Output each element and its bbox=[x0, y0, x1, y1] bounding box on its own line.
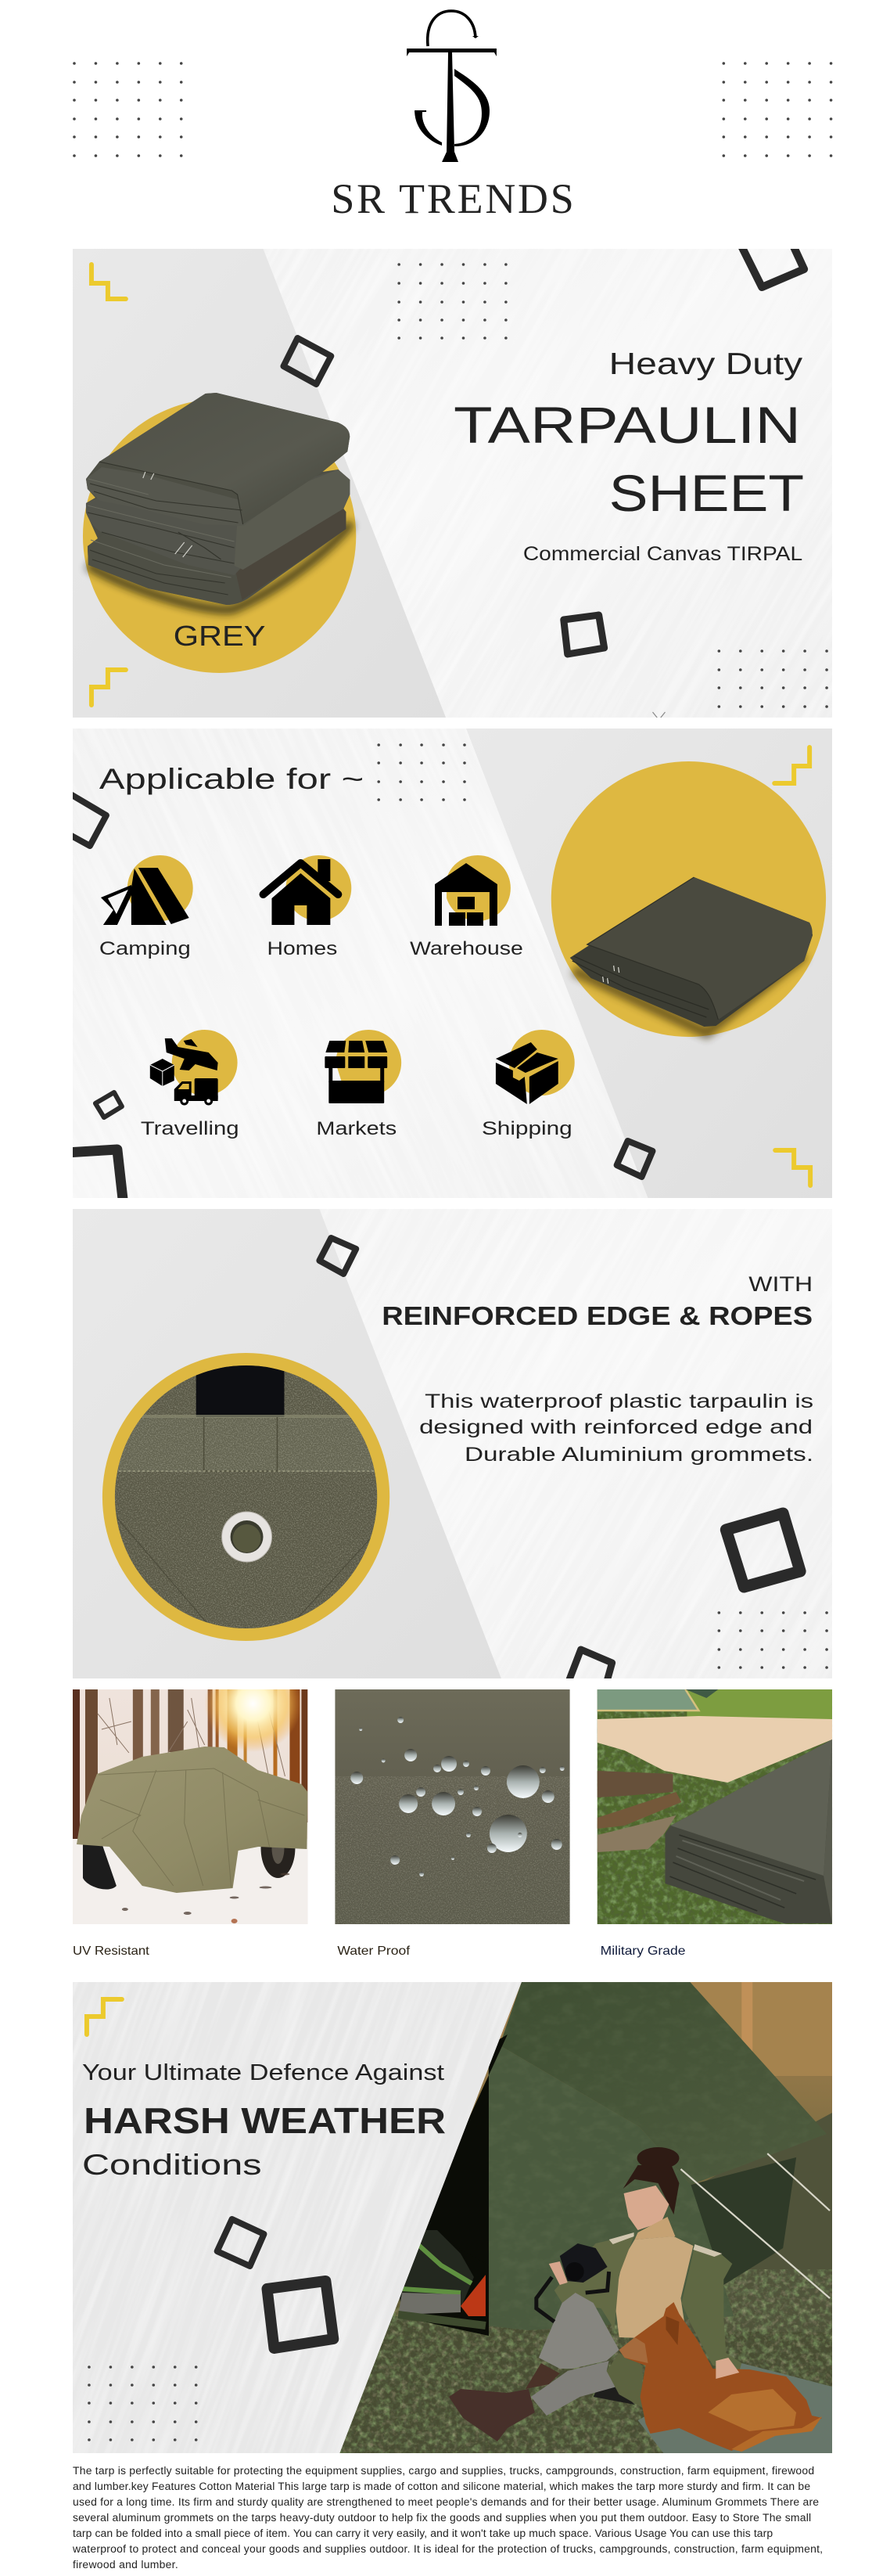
blanket bbox=[638, 2363, 832, 2453]
text block: product description: and lumber.key Features Cotton Material This large tarp is made of cotton and silicone material, which makes the tarp more sturdy and firm. It can be bbox=[73, 2480, 810, 2492]
accent: yellow zigzag top bbox=[774, 747, 809, 783]
label: Camping: Camping bbox=[99, 938, 191, 959]
woman bbox=[449, 2147, 741, 2441]
text block: product description: The tarp is perfectly suitable for protecting the equipment supplies, cargo and supplies, trucks, campgrounds, construction, farm equipment, firewood bbox=[73, 2464, 814, 2477]
accent: yellow zigzag bottom bbox=[775, 1150, 810, 1185]
text: WITH: WITH bbox=[748, 1272, 813, 1296]
icon: markets bbox=[325, 1030, 401, 1103]
text block: product description: firewood and lumber. bbox=[73, 2558, 178, 2571]
text block: product description: used for a long time. Its firm and sturdy quality are strengthened to meet people's demands and for their better usage. Aluminum Grommets There are bbox=[73, 2495, 819, 2508]
label: Warehouse: Warehouse bbox=[410, 938, 523, 959]
label: Military Grade: Military Grade bbox=[601, 1945, 686, 1958]
icon: travelling bbox=[150, 1030, 238, 1105]
icon: camping bbox=[101, 855, 193, 925]
icon: small chevron bbox=[653, 712, 665, 720]
text: description: This waterproof plastic tarpaulin is bbox=[425, 1391, 813, 1412]
photo: UV resistant covered vehicle bbox=[73, 1655, 307, 1925]
icon: warehouse bbox=[435, 855, 511, 926]
photo: water proof droplets bbox=[335, 1689, 570, 1925]
text: description: designed with reinforced edge and bbox=[419, 1416, 813, 1438]
tent bbox=[687, 2157, 796, 2285]
logo wordmark: SR TRENDS bbox=[331, 175, 574, 222]
text: Heavy Duty: Heavy Duty bbox=[609, 347, 803, 381]
product: folded grey tarpaulin bbox=[86, 393, 351, 610]
decorative squares bbox=[319, 1238, 800, 1702]
panel background bbox=[73, 249, 832, 718]
panel: reinforced edge and ropes bbox=[73, 1209, 832, 1702]
text: Commercial Canvas TIRPAL: Commercial Canvas TIRPAL bbox=[523, 543, 802, 565]
decorative squares bbox=[283, 227, 804, 654]
text block: product description: waterproof to protect and conceal your goods and supplies outdoor. It is ideal for the protection of trucks, campgrounds, construction, farm equipment, bbox=[72, 2542, 823, 2555]
text: description: Durable Aluminium grommets. bbox=[465, 1444, 813, 1466]
heading: Reinforced edge and ropes: REINFORCED EDGE & ROPES bbox=[382, 1301, 813, 1330]
panel: harsh weather conditions bbox=[73, 1982, 835, 2453]
text: description bbox=[419, 1391, 813, 1466]
logo mark bbox=[407, 11, 497, 162]
label: GREY: GREY bbox=[174, 620, 266, 652]
decorative squares bbox=[217, 2219, 333, 2348]
text block: product description bbox=[72, 2464, 823, 2571]
dot grid: bottom left bbox=[88, 2366, 197, 2441]
label: Homes: Homes bbox=[267, 938, 337, 959]
heading: Applicable for: Applicable for ~ bbox=[99, 763, 364, 795]
heading: SHEET: SHEET bbox=[609, 464, 804, 522]
panel: heavy duty tarpaulin hero bbox=[73, 227, 832, 720]
accent: yellow zigzag top bbox=[92, 264, 126, 299]
text: Your Ultimate Defence Against: Your Ultimate Defence Against bbox=[82, 2060, 444, 2085]
dot grid: bottom right bbox=[718, 1611, 828, 1669]
icon: homes bbox=[264, 855, 351, 925]
label: Shipping: Shipping bbox=[482, 1118, 572, 1139]
label: UV Resistant: UV Resistant bbox=[73, 1945, 149, 1958]
label: Travelling: Travelling bbox=[141, 1118, 239, 1139]
product disc bbox=[83, 399, 356, 673]
panel background bbox=[73, 729, 832, 1198]
dot grid: panel top bbox=[397, 263, 508, 340]
accent: yellow zigzag bbox=[87, 1999, 122, 2035]
decorative squares bbox=[43, 787, 653, 1205]
accent: yellow zigzag bottom bbox=[92, 670, 126, 705]
panel: applicable for bbox=[43, 729, 832, 1205]
heading: HARSH WEATHER: HARSH WEATHER bbox=[84, 2100, 446, 2141]
heading: TARPAULIN: TARPAULIN bbox=[454, 396, 801, 454]
label: Markets: Markets bbox=[316, 1118, 397, 1139]
dot grid: panel top bbox=[377, 743, 466, 801]
icon: shipping bbox=[496, 1030, 575, 1104]
photo: military grade rolled tarp bbox=[598, 1689, 832, 1924]
panel background: left light area bbox=[73, 1982, 522, 2453]
dot grid: header right bbox=[723, 62, 832, 157]
dog bbox=[619, 2302, 822, 2452]
dot grid: panel bottom right bbox=[718, 649, 828, 708]
text block: product description: several aluminum grommets on the tarps heavy-duty outdoor to help fix the goods and supplies when you put them outdoor. Easy to Store The small bbox=[73, 2511, 811, 2524]
heading: Conditions: Conditions bbox=[82, 2149, 262, 2181]
product disc bbox=[551, 761, 826, 1037]
photo: woman and dog at tent bbox=[336, 1982, 835, 2453]
product: flat folded tarpaulin bbox=[570, 877, 813, 1033]
dot grid: header left bbox=[73, 62, 183, 157]
label: Water Proof: Water Proof bbox=[337, 1945, 411, 1958]
panel background bbox=[73, 1209, 832, 1678]
logo: SR Trends bbox=[331, 11, 574, 222]
photo disc: canvas with grommet bbox=[102, 1353, 389, 1641]
text block: product description: tarp can be folded into a small piece of item. You can carry it very easily, and it won't take up much space. Various Usage You can use this tarp bbox=[73, 2527, 773, 2539]
